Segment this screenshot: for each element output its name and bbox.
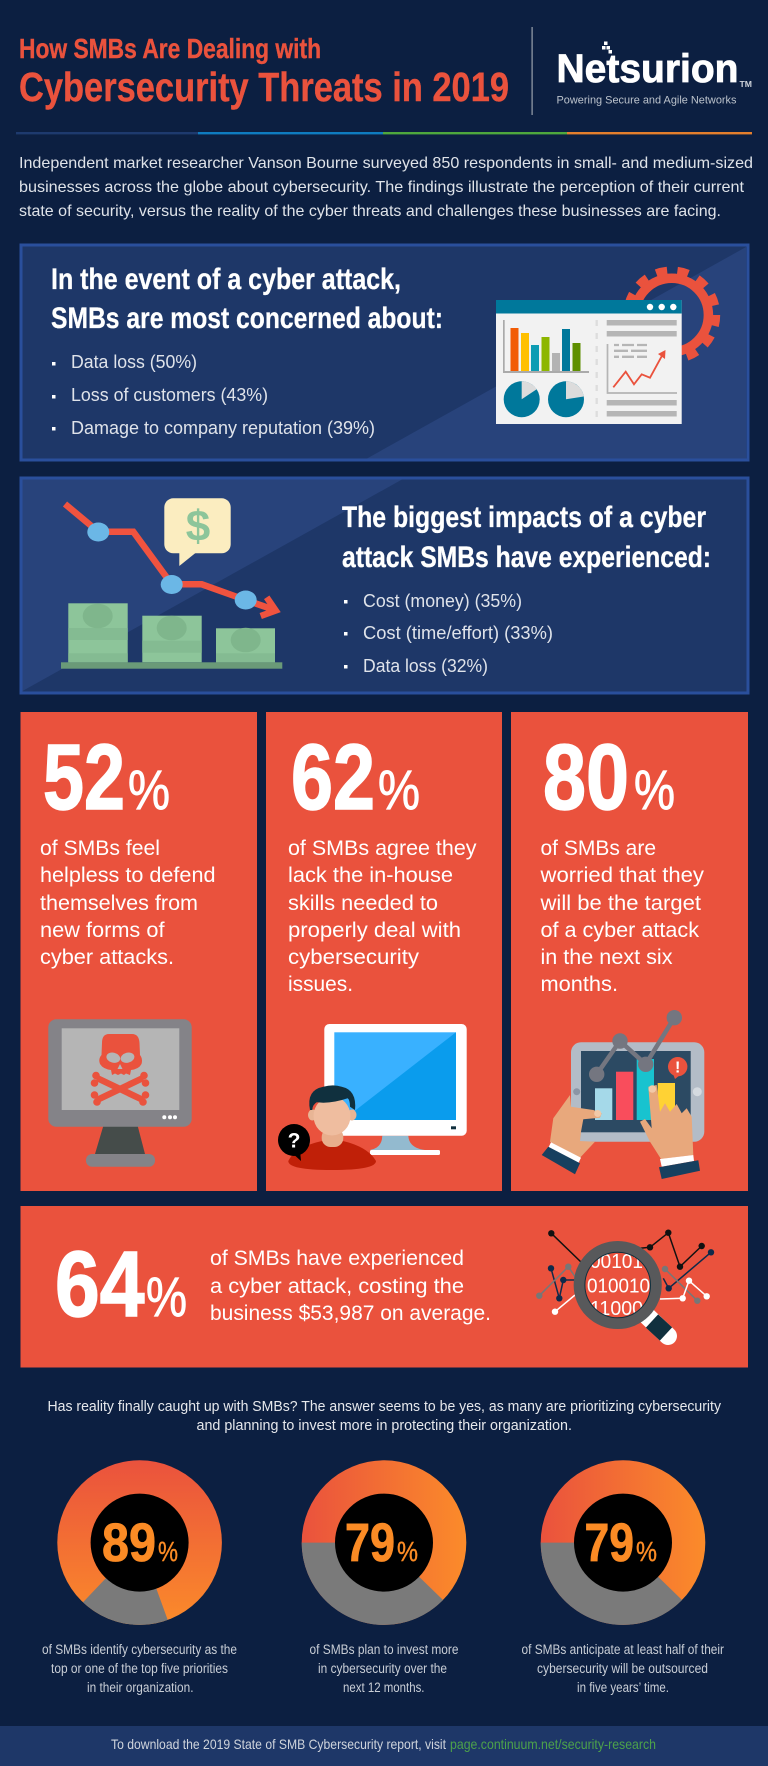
panel: impacts xyxy=(21,478,748,693)
caption: 79% invest: next 12 months. xyxy=(343,1680,424,1695)
text: cost of attack xyxy=(210,1247,491,1325)
donut: 89%: % xyxy=(158,1536,178,1567)
intro paragraph: state of security, versus the reality of the cyber threats and challenges these businesses are facing. xyxy=(19,203,721,220)
donut: 79% outsource: 79 xyxy=(584,1513,634,1573)
caption: 79% invest: in cybersecurity over the xyxy=(318,1661,447,1676)
caption: 79% outsource xyxy=(522,1642,724,1695)
heading: concerns xyxy=(51,263,443,335)
icon: magnifier with binary: 11000 xyxy=(590,1298,643,1320)
stat: 80%: % xyxy=(634,758,675,821)
list: impacts: Cost (time/effort) (33%) xyxy=(363,623,553,643)
logo: Netsurion xyxy=(556,42,752,106)
text: worried: will be the target xyxy=(539,892,701,915)
text: reality paragraph: Has reality finally caught up with SMBs? The answer seems to be yes, as many are prioritizing cybersecurity xyxy=(48,1399,722,1415)
icon: tablet with hands xyxy=(542,1010,704,1179)
text: lack skills: properly deal with xyxy=(288,919,461,942)
donut: 79% invest: % xyxy=(397,1536,418,1567)
donut: 79% invest: 79 xyxy=(345,1513,395,1573)
icon: tablet with hands: ! xyxy=(675,1060,680,1076)
list: concerns: Data loss (50%) xyxy=(71,352,197,372)
intro paragraph xyxy=(19,155,753,220)
title xyxy=(19,33,509,110)
panel: 62% xyxy=(266,712,502,1191)
title: Cybersecurity Threats in 2019 xyxy=(19,64,509,110)
list: concerns xyxy=(52,352,375,438)
donut: 89% xyxy=(57,1460,222,1625)
text: helpless: helpless to defend xyxy=(40,864,216,887)
heading: concerns: In the event of a cyber attack, xyxy=(51,263,401,296)
text: helpless: cyber attacks. xyxy=(40,946,174,969)
caption: 79% outsource: of SMBs anticipate at least half of their xyxy=(522,1642,724,1657)
title: How SMBs Are Dealing with xyxy=(19,33,321,64)
icon: magnifier with binary: 00101 xyxy=(590,1251,643,1273)
stat: 62%: 62 xyxy=(291,725,375,829)
icon: falling money chart: $ xyxy=(186,502,210,551)
caption: 79% outsource: cybersecurity will be outsourced xyxy=(537,1661,708,1676)
text: lack skills: of SMBs agree they xyxy=(288,837,477,860)
panel: 80% xyxy=(511,712,748,1191)
text: lack skills: lack the in-house xyxy=(288,864,453,887)
list: impacts: Cost (money) (35%) xyxy=(363,591,522,611)
text: worried: of SMBs are xyxy=(540,837,656,860)
text: cost of attack: of SMBs have experienced xyxy=(210,1247,464,1270)
caption: 79% outsource: in five years’ time. xyxy=(577,1680,669,1695)
text: lack skills: cybersecurity xyxy=(288,946,420,969)
stat: 52%: 52 xyxy=(43,725,125,829)
text: helpless: new forms of xyxy=(40,919,165,942)
caption: 79% invest xyxy=(310,1642,458,1695)
caption: 89% xyxy=(42,1642,237,1695)
text: worried: worried that they xyxy=(539,864,705,887)
stat: 64%: % xyxy=(146,1265,187,1328)
icon: falling money chart xyxy=(61,498,282,669)
text: lack skills: skills needed to xyxy=(288,892,438,915)
stat: 80%: 80 xyxy=(543,725,629,829)
text: worried xyxy=(539,837,705,996)
stat: 64%: 64 xyxy=(55,1232,145,1336)
logo: Netsurion: TM xyxy=(740,80,752,89)
text: lack skills: issues. xyxy=(288,973,353,996)
text: lack skills xyxy=(288,837,477,996)
list: impacts: Data loss (32%) xyxy=(363,656,488,676)
text: helpless xyxy=(40,837,216,969)
donut: 79% outsource: % xyxy=(636,1536,657,1567)
caption: 89%: of SMBs identify cybersecurity as the xyxy=(42,1642,237,1657)
panel: 52% xyxy=(20,712,257,1191)
icon: person and monitor: ? xyxy=(288,1130,300,1152)
stat: 62%: % xyxy=(378,758,420,821)
text: reality paragraph xyxy=(48,1399,722,1434)
text: worried: months. xyxy=(540,973,618,996)
panel: concerns xyxy=(21,245,748,460)
donut: 89%: 89 xyxy=(102,1513,156,1573)
caption: 89%: in their organization. xyxy=(87,1680,194,1695)
caption: 79% invest: of SMBs plan to invest more xyxy=(310,1642,458,1657)
footer bar: page.continuum.net/security-research xyxy=(450,1736,656,1752)
heading: concerns: SMBs are most concerned about: xyxy=(51,302,443,335)
stat: 52%: % xyxy=(128,758,170,821)
text: cost of attack: a cyber attack, costing the xyxy=(210,1275,464,1298)
icon: magnifier with binary: 010010 xyxy=(587,1276,650,1298)
text: worried: in the next six xyxy=(540,946,673,969)
list: concerns: Damage to company reputation (39%) xyxy=(71,418,375,438)
donut: 79% outsource xyxy=(541,1460,705,1625)
text: helpless: of SMBs feel xyxy=(40,837,160,860)
list: concerns: Loss of customers (43%) xyxy=(71,385,268,405)
icon: magnifier with binary xyxy=(536,1230,714,1336)
icon: person and monitor xyxy=(278,1024,467,1170)
logo: Netsurion: Powering Secure and Agile Networks xyxy=(556,94,737,106)
text: worried: of a cyber attack xyxy=(540,919,700,942)
icon: monitor with skull xyxy=(48,1019,192,1167)
text: reality paragraph: and planning to invest more in protecting their organization. xyxy=(196,1418,572,1434)
text: helpless: themselves from xyxy=(40,892,198,915)
donut: 79% invest xyxy=(302,1460,466,1625)
intro paragraph: businesses across the globe about cybersecurity. The findings illustrate the perception of their current xyxy=(19,179,745,196)
footer bar: To download the 2019 State of SMB Cybersecurity report, visit xyxy=(111,1736,446,1752)
heading: impacts xyxy=(342,501,711,574)
list: impacts xyxy=(344,591,553,676)
text: cost of attack: business $53,987 on average. xyxy=(210,1302,491,1325)
icon: dashboard with gear xyxy=(496,271,716,424)
logo: Netsurion: Netsurion xyxy=(556,47,738,91)
caption: 89%: top or one of the top five priorities xyxy=(51,1661,228,1676)
panel: 64% xyxy=(20,1206,748,1368)
intro paragraph: Independent market researcher Vanson Bourne surveyed 850 respondents in small- and medium-sized xyxy=(19,155,753,172)
footer bar xyxy=(0,1726,768,1766)
